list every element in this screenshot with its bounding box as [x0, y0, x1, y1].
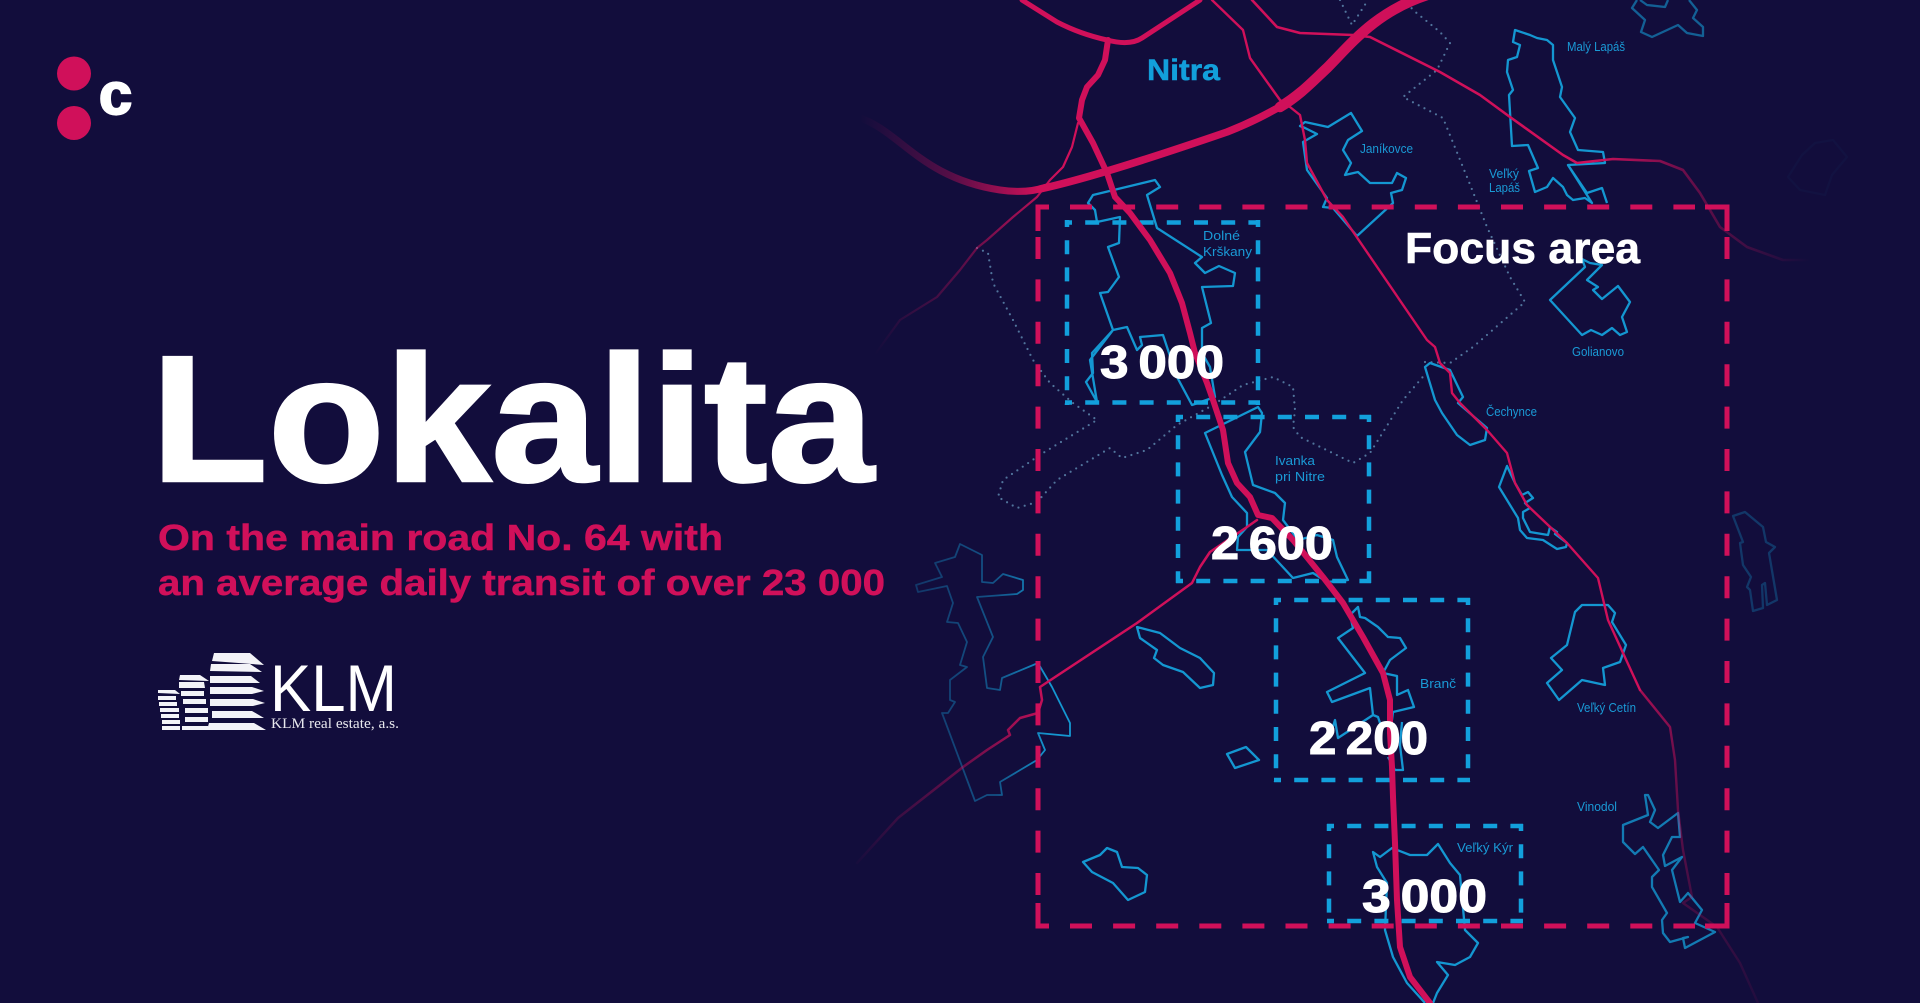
title: Lokalita — [151, 319, 876, 520]
zone: Veľký Kýr — [1327, 824, 1523, 923]
zone: Ivanka pri Nitre — [1176, 415, 1371, 583]
outline: Veľký Cetín — [1547, 605, 1626, 700]
label: Veľký Kýr: Veľký Kýr — [1457, 841, 1513, 855]
focus area frame — [1038, 207, 1727, 926]
wordmark: KLM — [270, 651, 397, 725]
subtitle: On the main road No. 64 with — [158, 517, 723, 558]
outline: far north-east faded village — [1788, 140, 1847, 195]
zone: Dolné Krškany — [1065, 220, 1260, 405]
road: north-east secondary — [1252, 0, 1827, 260]
outline: small parcel — [1227, 747, 1259, 768]
road: southern faded section — [1640, 690, 1758, 1003]
outline: Branč — [1327, 607, 1414, 770]
label: Dolné Krškany — [1203, 229, 1253, 259]
number: Branč: 2 200 — [1309, 712, 1428, 764]
zone: Branč — [1274, 598, 1470, 782]
roads — [857, 0, 1827, 1003]
number: Ivanka pri Nitre: 2 600 — [1211, 517, 1333, 569]
village outlines — [916, 0, 1847, 1003]
outline: Dolné Krškany — [1086, 180, 1235, 405]
subtitle — [158, 517, 885, 603]
outline: island west of Branč — [1137, 627, 1214, 688]
label: Nitra: Nitra — [1147, 54, 1220, 87]
label: Veľký Lapáš: Lapáš — [1489, 181, 1520, 195]
outline: southern island — [1083, 848, 1147, 900]
map — [857, 0, 1847, 1003]
company name: KLM real estate, a.s. — [271, 716, 399, 732]
subtitle: an average daily transit of over 23 000 — [158, 562, 885, 603]
outline: Veľký and Malý Lapáš — [1507, 30, 1607, 203]
road: ring road west — [857, 117, 1047, 191]
icon: buildings — [158, 653, 266, 730]
road: ring road — [1040, 104, 1285, 189]
KLM real estate logo — [158, 651, 399, 732]
label: Veľký Lapáš — [1489, 167, 1520, 195]
road: north-west to east secondary — [1212, 0, 1640, 690]
label: Malý Lapáš: Malý Lapáš — [1567, 40, 1625, 54]
outline: northern fragment — [1632, 0, 1703, 37]
label: Veľký Cetín: Veľký Cetín — [1577, 701, 1636, 715]
outline: western faded village — [916, 544, 1070, 801]
road: main road No. 64 — [1079, 40, 1430, 1003]
label: Ivanka pri Nitre: pri Nitre — [1275, 470, 1325, 484]
outline: Veľký Kýr — [1373, 844, 1478, 1003]
label: Golianovo: Golianovo — [1572, 345, 1624, 359]
number: Veľký Kýr: 3 000 — [1362, 870, 1487, 922]
outline: eastern faded village — [1733, 512, 1777, 611]
road: ring road north-east — [1280, 0, 1427, 107]
outline: Janíkovce — [1300, 113, 1406, 236]
label: Dolné Krškany: Dolné — [1203, 229, 1240, 243]
number: Dolné Krškany: 3 000 — [1100, 336, 1224, 388]
label: Ivanka pri Nitre: Ivanka — [1275, 454, 1315, 468]
road: northern bypass — [1022, 0, 1200, 43]
outline: Golianovo — [1550, 259, 1630, 335]
outline: Vinodol — [1623, 795, 1715, 948]
label: Veľký Lapáš: Veľký — [1489, 167, 1520, 181]
brand logo: c — [99, 62, 132, 127]
label: Čechynce: Čechynce — [1486, 404, 1537, 419]
outline: village south of Čechynce — [1499, 466, 1567, 549]
outline: Ivanka pri Nitre — [1205, 407, 1348, 582]
traffic count zones — [1065, 220, 1523, 923]
brand logo — [57, 56, 132, 140]
label: Branč: Branč — [1420, 677, 1456, 691]
place labels — [1147, 40, 1636, 855]
road: western branch — [876, 123, 1078, 353]
label: Dolné Krškany: Krškany — [1203, 245, 1253, 259]
label: Vinodol: Vinodol — [1577, 800, 1617, 814]
heading: Focus area: Focus area — [1405, 224, 1641, 273]
dotted district boundaries — [977, 0, 1525, 508]
traffic numbers — [1100, 336, 1487, 922]
label: Janíkovce: Janíkovce — [1360, 142, 1413, 156]
road: south-western branch — [857, 520, 1257, 863]
label: Ivanka pri Nitre — [1275, 454, 1325, 484]
outline: Čechynce — [1425, 363, 1487, 445]
